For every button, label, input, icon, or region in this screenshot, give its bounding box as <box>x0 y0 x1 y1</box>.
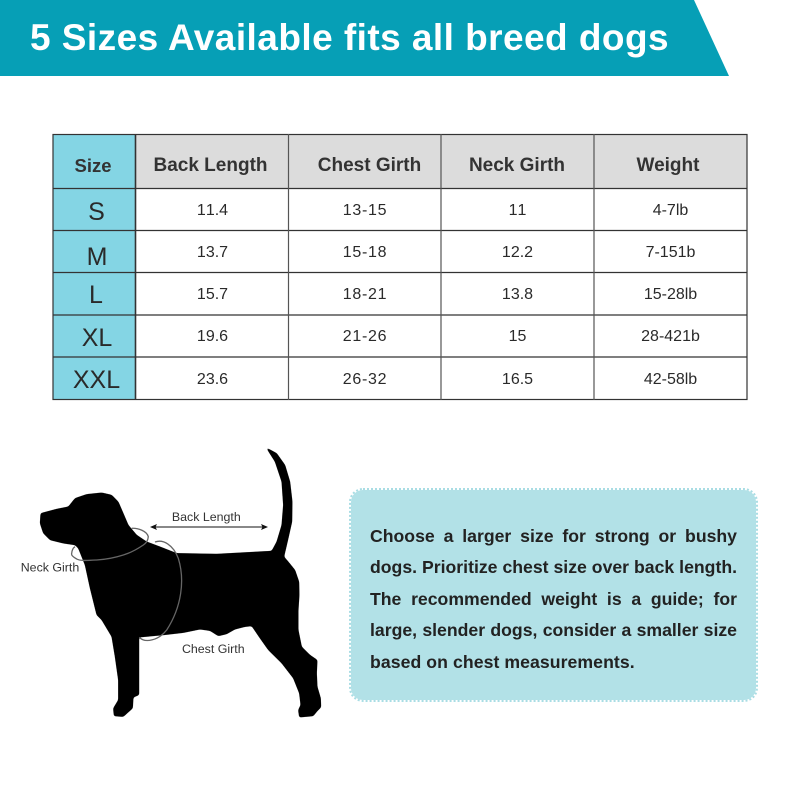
title: 5 Sizes Available fits all breed dogs <box>30 17 669 58</box>
size chart table <box>52 134 748 400</box>
row S: 11 <box>509 202 526 219</box>
advice panel <box>349 488 758 702</box>
row XXL: 16.5 <box>502 371 533 388</box>
header row: Neck Girth <box>469 155 565 176</box>
chest girth loop <box>139 541 182 640</box>
row XL: 21-26 <box>343 328 387 345</box>
row XXL: XXL <box>73 366 120 394</box>
advice text: large, slender dogs, consider a smaller size <box>370 620 737 640</box>
dog measurement diagram <box>21 448 322 718</box>
header row: Back Length <box>153 155 268 176</box>
row M: 7-151b <box>646 244 695 261</box>
row L: 18-21 <box>343 286 387 303</box>
row M: 12.2 <box>502 244 533 261</box>
row XL: 19.6 <box>197 328 228 345</box>
row M: 13.7 <box>197 244 228 261</box>
row XL <box>82 324 700 352</box>
row S: S <box>88 198 105 226</box>
row M: M <box>87 243 107 271</box>
row L: 15-28lb <box>644 286 697 303</box>
icon: dog silhouette <box>40 448 321 717</box>
header row: Size <box>74 155 112 176</box>
advice text: The recommended weight is a guide; for <box>370 589 737 609</box>
advice text: dogs. Prioritize chest size over back length. <box>370 557 737 577</box>
neck girth loop <box>72 528 148 560</box>
row L <box>89 281 697 309</box>
row S: 11.4 <box>197 202 228 219</box>
row XL: XL <box>82 324 112 352</box>
row M: 15-18 <box>343 244 387 261</box>
row XL: 28-421b <box>641 328 700 345</box>
row L: 15.7 <box>197 286 228 303</box>
row XXL <box>73 366 697 394</box>
row L: 13.8 <box>502 286 533 303</box>
row XL: 15 <box>509 328 526 345</box>
label: back length: Back Length <box>172 510 241 524</box>
header row: Chest Girth <box>318 155 421 176</box>
header row: Weight <box>636 155 699 176</box>
back length arrow <box>150 524 268 530</box>
row S: 13-15 <box>343 202 387 219</box>
row XXL: 23.6 <box>197 371 228 388</box>
row M <box>87 243 695 271</box>
advice text: based on chest measurements. <box>370 652 635 672</box>
row S <box>88 198 688 226</box>
row S: 4-7lb <box>653 202 688 219</box>
row XXL: 42-58lb <box>644 371 697 388</box>
title banner <box>0 0 729 76</box>
row L: L <box>89 281 103 309</box>
label: chest girth: Chest Girth <box>182 642 245 656</box>
advice text: Choose a larger size for strong or bushy <box>370 526 737 546</box>
label: neck girth: Neck Girth <box>21 561 79 575</box>
header row <box>74 155 700 176</box>
row XXL: 26-32 <box>343 371 387 388</box>
